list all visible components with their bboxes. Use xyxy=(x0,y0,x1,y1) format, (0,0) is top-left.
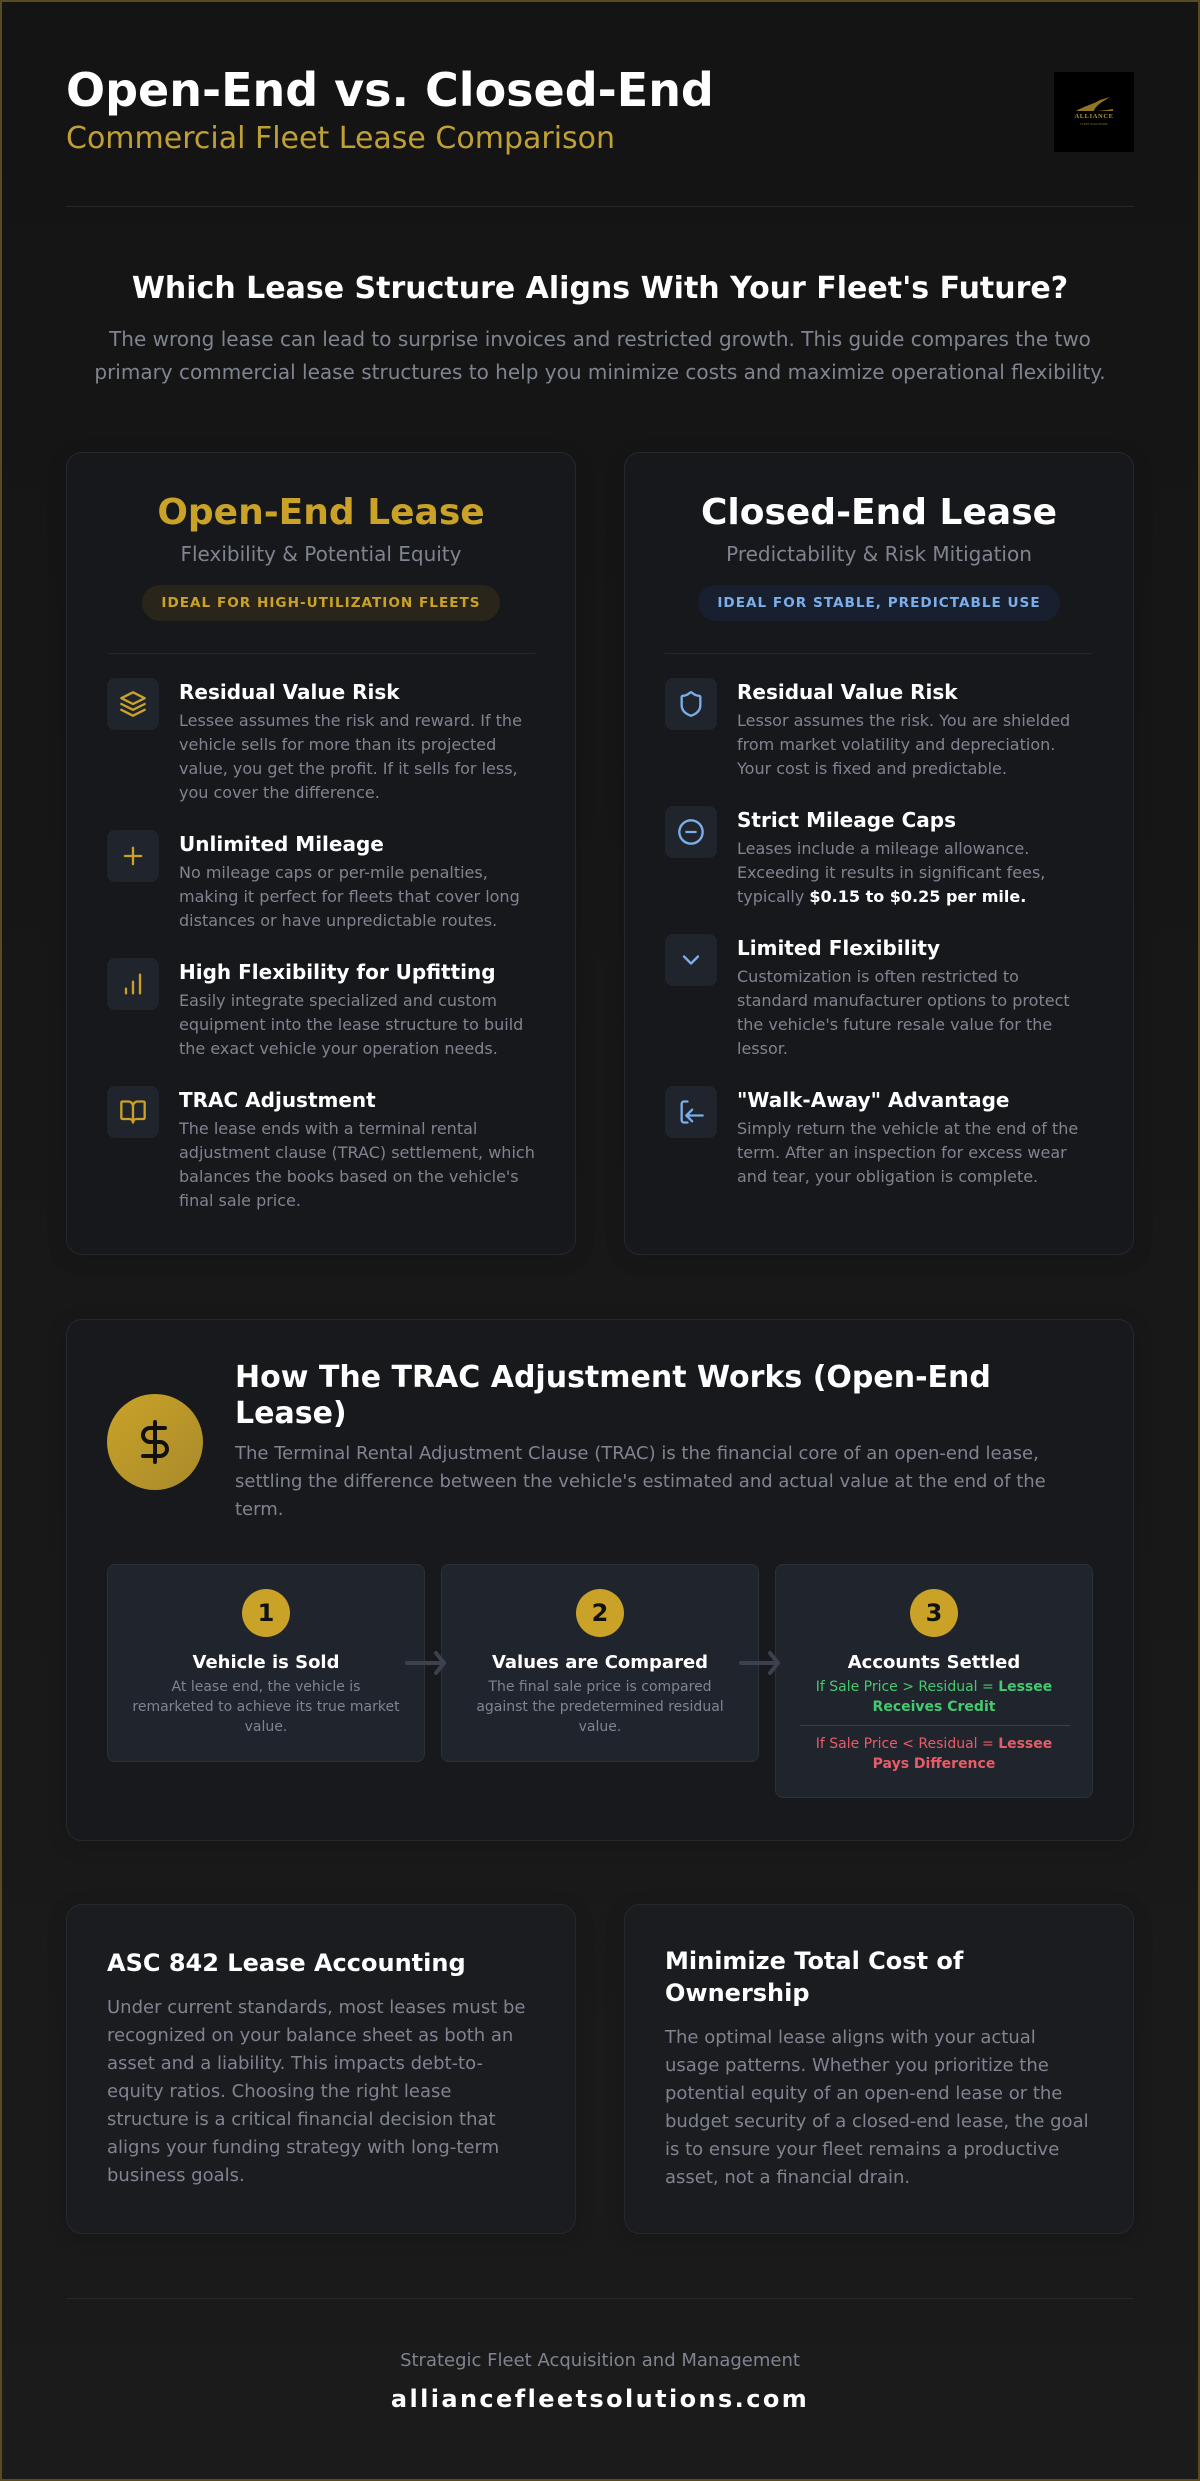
item: walk-away advantage xyxy=(665,1086,1078,1186)
text: The optimal lease aligns with your actual xyxy=(665,2027,1036,2048)
text: from market volatility and depreciation. xyxy=(737,735,1055,754)
text xyxy=(737,711,1070,778)
panel: ASC 842 xyxy=(66,1904,576,2234)
step 1 xyxy=(107,1564,425,1762)
credit outcome xyxy=(816,1679,1052,1715)
icon: bars xyxy=(107,958,159,1010)
text: Lessee assumes the risk and reward. If the xyxy=(179,711,522,730)
text: The lease ends with a terminal rental xyxy=(179,1119,477,1138)
text xyxy=(737,839,1045,906)
heading xyxy=(665,1947,964,2007)
step text: value. xyxy=(579,1719,621,1735)
text xyxy=(179,863,520,930)
debit outcome xyxy=(816,1736,1052,1772)
text: Lessor assumes the risk. You are shielded xyxy=(737,711,1070,730)
step number: 3 xyxy=(926,1599,942,1627)
TRAC description: term. xyxy=(235,1499,283,1520)
logo swoosh xyxy=(1076,97,1113,111)
text: standard manufacturer options to protect xyxy=(737,991,1070,1010)
heading: Residual Value Risk xyxy=(179,680,400,704)
heading: Unlimited Mileage xyxy=(179,832,384,856)
heading: "Walk-Away" Advantage xyxy=(737,1088,1009,1112)
debit outcome: Pays Difference xyxy=(873,1756,995,1772)
step 3 xyxy=(775,1564,1093,1798)
TRAC description xyxy=(234,1443,1046,1520)
text: the vehicle's future resale value for the xyxy=(737,1015,1052,1034)
text: Customization is often restricted to xyxy=(737,967,1019,986)
text: you cover the difference. xyxy=(179,783,380,802)
text: usage patterns. Whether you prioritize the xyxy=(665,2055,1049,2076)
text: equity ratios. Choosing the right lease xyxy=(107,2081,451,2102)
text xyxy=(737,1119,1078,1186)
text: Simply return the vehicle at the end of the xyxy=(737,1119,1078,1138)
icon: minus circle xyxy=(665,806,717,858)
text xyxy=(178,1119,535,1210)
step number xyxy=(910,1589,958,1637)
heading: Residual Value Risk xyxy=(737,680,958,704)
text: is to ensure your fleet remains a productive xyxy=(665,2139,1059,2160)
text xyxy=(179,991,523,1058)
text: asset, not a financial drain. xyxy=(665,2167,910,2188)
text xyxy=(737,967,1070,1058)
text: Easily integrate specialized and custom xyxy=(179,991,497,1010)
TRAC description: The Terminal Rental Adjustment Clause (TRAC) is the financial core of an open-end lease, xyxy=(235,1443,1039,1464)
arrow: step 1 to 2 xyxy=(405,1651,446,1675)
icon: book xyxy=(107,1086,159,1138)
heading: Minimize Total Cost of xyxy=(665,1947,963,1975)
logo xyxy=(1054,72,1134,152)
closed-end pill xyxy=(698,585,1060,621)
text: budget security of a closed-end lease, the goal xyxy=(665,2111,1089,2132)
panel: open-end lease xyxy=(66,452,576,1255)
open-end pill: IDEAL FOR HIGH-UTILIZATION FLEETS xyxy=(161,595,481,611)
closed-end subtitle: Predictability & Risk Mitigation xyxy=(726,542,1032,566)
icon: shield xyxy=(665,678,717,730)
text: vehicle sells for more than its projected xyxy=(179,735,496,754)
text: No mileage caps or per-mile penalties, xyxy=(179,863,488,882)
item: residual value risk xyxy=(665,678,1070,778)
panel: closed-end lease xyxy=(624,452,1134,1255)
closed-end title: Closed-End Lease xyxy=(701,492,1057,533)
text: distances or have unpredictable routes. xyxy=(179,911,497,930)
step text xyxy=(476,1679,724,1735)
heading: Strict Mileage Caps xyxy=(737,808,956,832)
intro paragraph: The wrong lease can lead to surprise invoices and restricted growth. This guide compares the two xyxy=(109,327,1091,351)
heading: High Flexibility for Upfitting xyxy=(179,960,496,984)
step 2 xyxy=(441,1564,759,1762)
step heading: Accounts Settled xyxy=(848,1652,1020,1673)
step number xyxy=(576,1589,624,1637)
TRAC heading xyxy=(235,1360,991,1431)
text: typically $0.15 to $0.25 per mile. xyxy=(737,887,1026,906)
step text: value. xyxy=(245,1719,287,1735)
arrow: step 2 to 3 xyxy=(739,1651,780,1675)
TRAC heading: Lease) xyxy=(235,1396,347,1431)
text xyxy=(179,711,522,802)
step heading: Vehicle is Sold xyxy=(192,1652,340,1673)
step number: 1 xyxy=(258,1599,274,1627)
icon: plus xyxy=(107,830,159,882)
step text xyxy=(132,1679,400,1735)
text: lessor. xyxy=(737,1039,788,1058)
item: residual value risk xyxy=(107,678,522,802)
footer website: alliancefleetsolutions.com xyxy=(391,2385,809,2413)
intro paragraph: primary commercial lease structures to help you minimize costs and maximize operational flexibility. xyxy=(94,360,1106,384)
open-end pill xyxy=(142,585,500,621)
text: aligns your funding strategy with long-term xyxy=(107,2137,499,2158)
logo wordmark: ALLIANCE xyxy=(1074,113,1114,120)
text: business goals. xyxy=(107,2165,245,2186)
debit outcome: If Sale Price < Residual = Lessee xyxy=(816,1736,1052,1752)
TRAC heading: How The TRAC Adjustment Works (Open-End xyxy=(235,1360,991,1395)
footer tagline: Strategic Fleet Acquisition and Management xyxy=(400,2350,800,2371)
credit outcome: Receives Credit xyxy=(873,1699,995,1715)
text: potential equity of an open-end lease or the xyxy=(665,2083,1062,2104)
item: limited flexibility xyxy=(665,934,1070,1058)
icon: dollar coin xyxy=(107,1394,203,1490)
panel: TRAC adjustment xyxy=(66,1319,1134,1841)
closed-end pill: IDEAL FOR STABLE, PREDICTABLE USE xyxy=(717,595,1041,611)
credit outcome: If Sale Price > Residual = Lessee xyxy=(816,1679,1052,1695)
text: structure is a critical financial decision that xyxy=(107,2109,496,2130)
icon: return arrow xyxy=(665,1086,717,1138)
text xyxy=(664,2027,1089,2188)
intro heading: Which Lease Structure Aligns With Your Fleet's Future? xyxy=(132,271,1068,306)
heading: TRAC Adjustment xyxy=(179,1088,376,1112)
header title: Open-End vs. Closed-End xyxy=(66,63,714,117)
TRAC description: settling the difference between the vehicle's estimated and actual value at the end of the xyxy=(235,1471,1046,1492)
heading: Ownership xyxy=(665,1979,810,2007)
text: equipment into the lease structure to build xyxy=(179,1015,523,1034)
step text: At lease end, the vehicle is xyxy=(172,1679,360,1695)
panel: total cost of ownership xyxy=(624,1904,1134,2234)
text xyxy=(107,1997,525,2186)
text: final sale price. xyxy=(179,1191,301,1210)
text: Under current standards, most leases must be xyxy=(107,1997,525,2018)
item: unlimited mileage xyxy=(107,830,520,930)
text: the exact vehicle your operation needs. xyxy=(179,1039,498,1058)
open-end title: Open-End Lease xyxy=(157,492,485,533)
text: term. After an inspection for excess wear xyxy=(737,1143,1067,1162)
step text: remarketed to achieve its true market xyxy=(132,1699,400,1715)
text: making it perfect for fleets that cover long xyxy=(179,887,520,906)
step number xyxy=(242,1589,290,1637)
text: Leases include a mileage allowance. xyxy=(737,839,1029,858)
heading: Limited Flexibility xyxy=(737,936,940,960)
header subtitle: Commercial Fleet Lease Comparison xyxy=(66,121,615,156)
item: upfitting xyxy=(107,958,523,1058)
text: and tear, your obligation is complete. xyxy=(737,1167,1038,1186)
step text: The final sale price is compared xyxy=(488,1679,712,1695)
text: recognized on your balance sheet as both an xyxy=(107,2025,513,2046)
open-end subtitle: Flexibility & Potential Equity xyxy=(180,542,461,566)
icon: chevron down xyxy=(665,934,717,986)
text: asset and a liability. This impacts debt-to- xyxy=(107,2053,483,2074)
text: adjustment clause (TRAC) settlement, which xyxy=(179,1143,535,1162)
step heading: Values are Compared xyxy=(492,1652,708,1673)
item: trac adjustment xyxy=(107,1086,535,1210)
icon: layers xyxy=(107,678,159,730)
text: Exceeding it results in significant fees, xyxy=(737,863,1045,882)
text: Your cost is fixed and predictable. xyxy=(737,759,1007,778)
item: strict mileage caps xyxy=(665,806,1045,906)
step text: against the predetermined residual xyxy=(476,1699,724,1715)
intro paragraph xyxy=(94,327,1106,384)
logo tagline: FLEET SOLUTIONS xyxy=(1080,122,1108,126)
text: value, you get the profit. If it sells for less, xyxy=(179,759,518,778)
step number: 2 xyxy=(592,1599,608,1627)
text: balances the books based on the vehicle's xyxy=(179,1167,519,1186)
heading: ASC 842 Lease Accounting xyxy=(107,1949,466,1977)
